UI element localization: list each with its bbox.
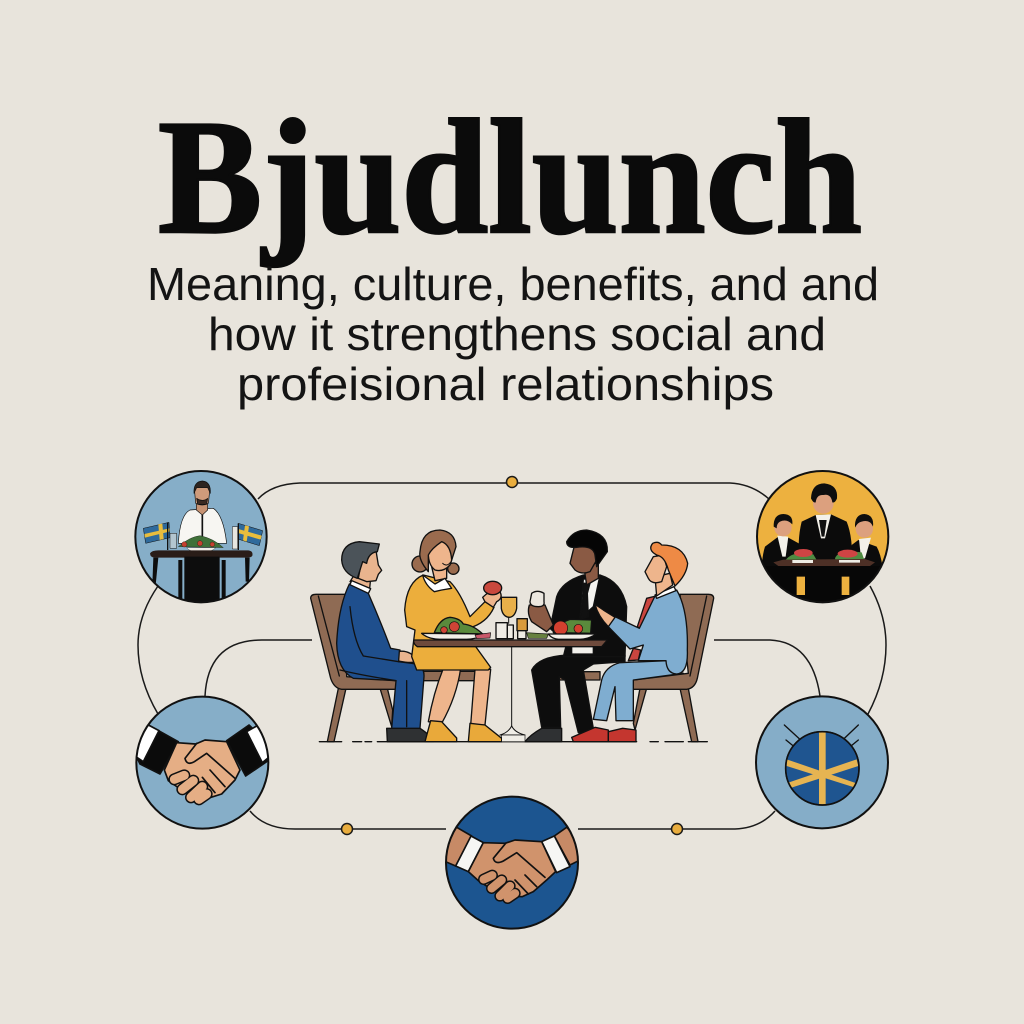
subtitle [147,258,879,410]
host figure [178,481,227,543]
infographic canvas [134,117,890,930]
centre guest [799,483,852,565]
subtitle: Meaning, culture, benefits, and and [147,258,879,310]
wine glass, cups and food on the table [496,597,548,639]
icon circle: Swedish cross emblem [756,696,888,828]
hands [468,840,556,897]
table [150,550,252,558]
person: woman in yellow dress [405,530,502,742]
ground line [319,740,707,744]
subtitle: how it strengthens social and [208,308,826,360]
connector network [138,476,886,834]
salad plates and table [774,549,875,602]
person: man in navy suit [337,542,433,742]
icon circle: three guests in black suits [757,471,888,605]
title: Bjudlunch [158,87,862,268]
table [414,640,607,742]
icon circle: host at a table with Swedish flags [135,471,267,605]
cuffs [135,725,178,774]
left salad plate [422,617,491,639]
left chair [311,594,476,742]
person: man in black suit [525,530,627,742]
side guests [762,514,882,566]
right chair [549,594,714,742]
icon circle: handshake on navy [442,797,583,929]
right salad plate [548,619,596,639]
salad plate [178,536,223,552]
fingers [484,875,515,898]
central illustration: four people at a lunch table [311,530,714,742]
person: man in light blue suit [572,542,688,742]
flags [143,522,263,550]
subtitle: profeisional relationships [237,358,774,410]
hands [164,740,240,797]
cuffs [447,827,472,867]
icon circle: handshake on light blue [133,697,272,829]
fingers [174,775,207,799]
